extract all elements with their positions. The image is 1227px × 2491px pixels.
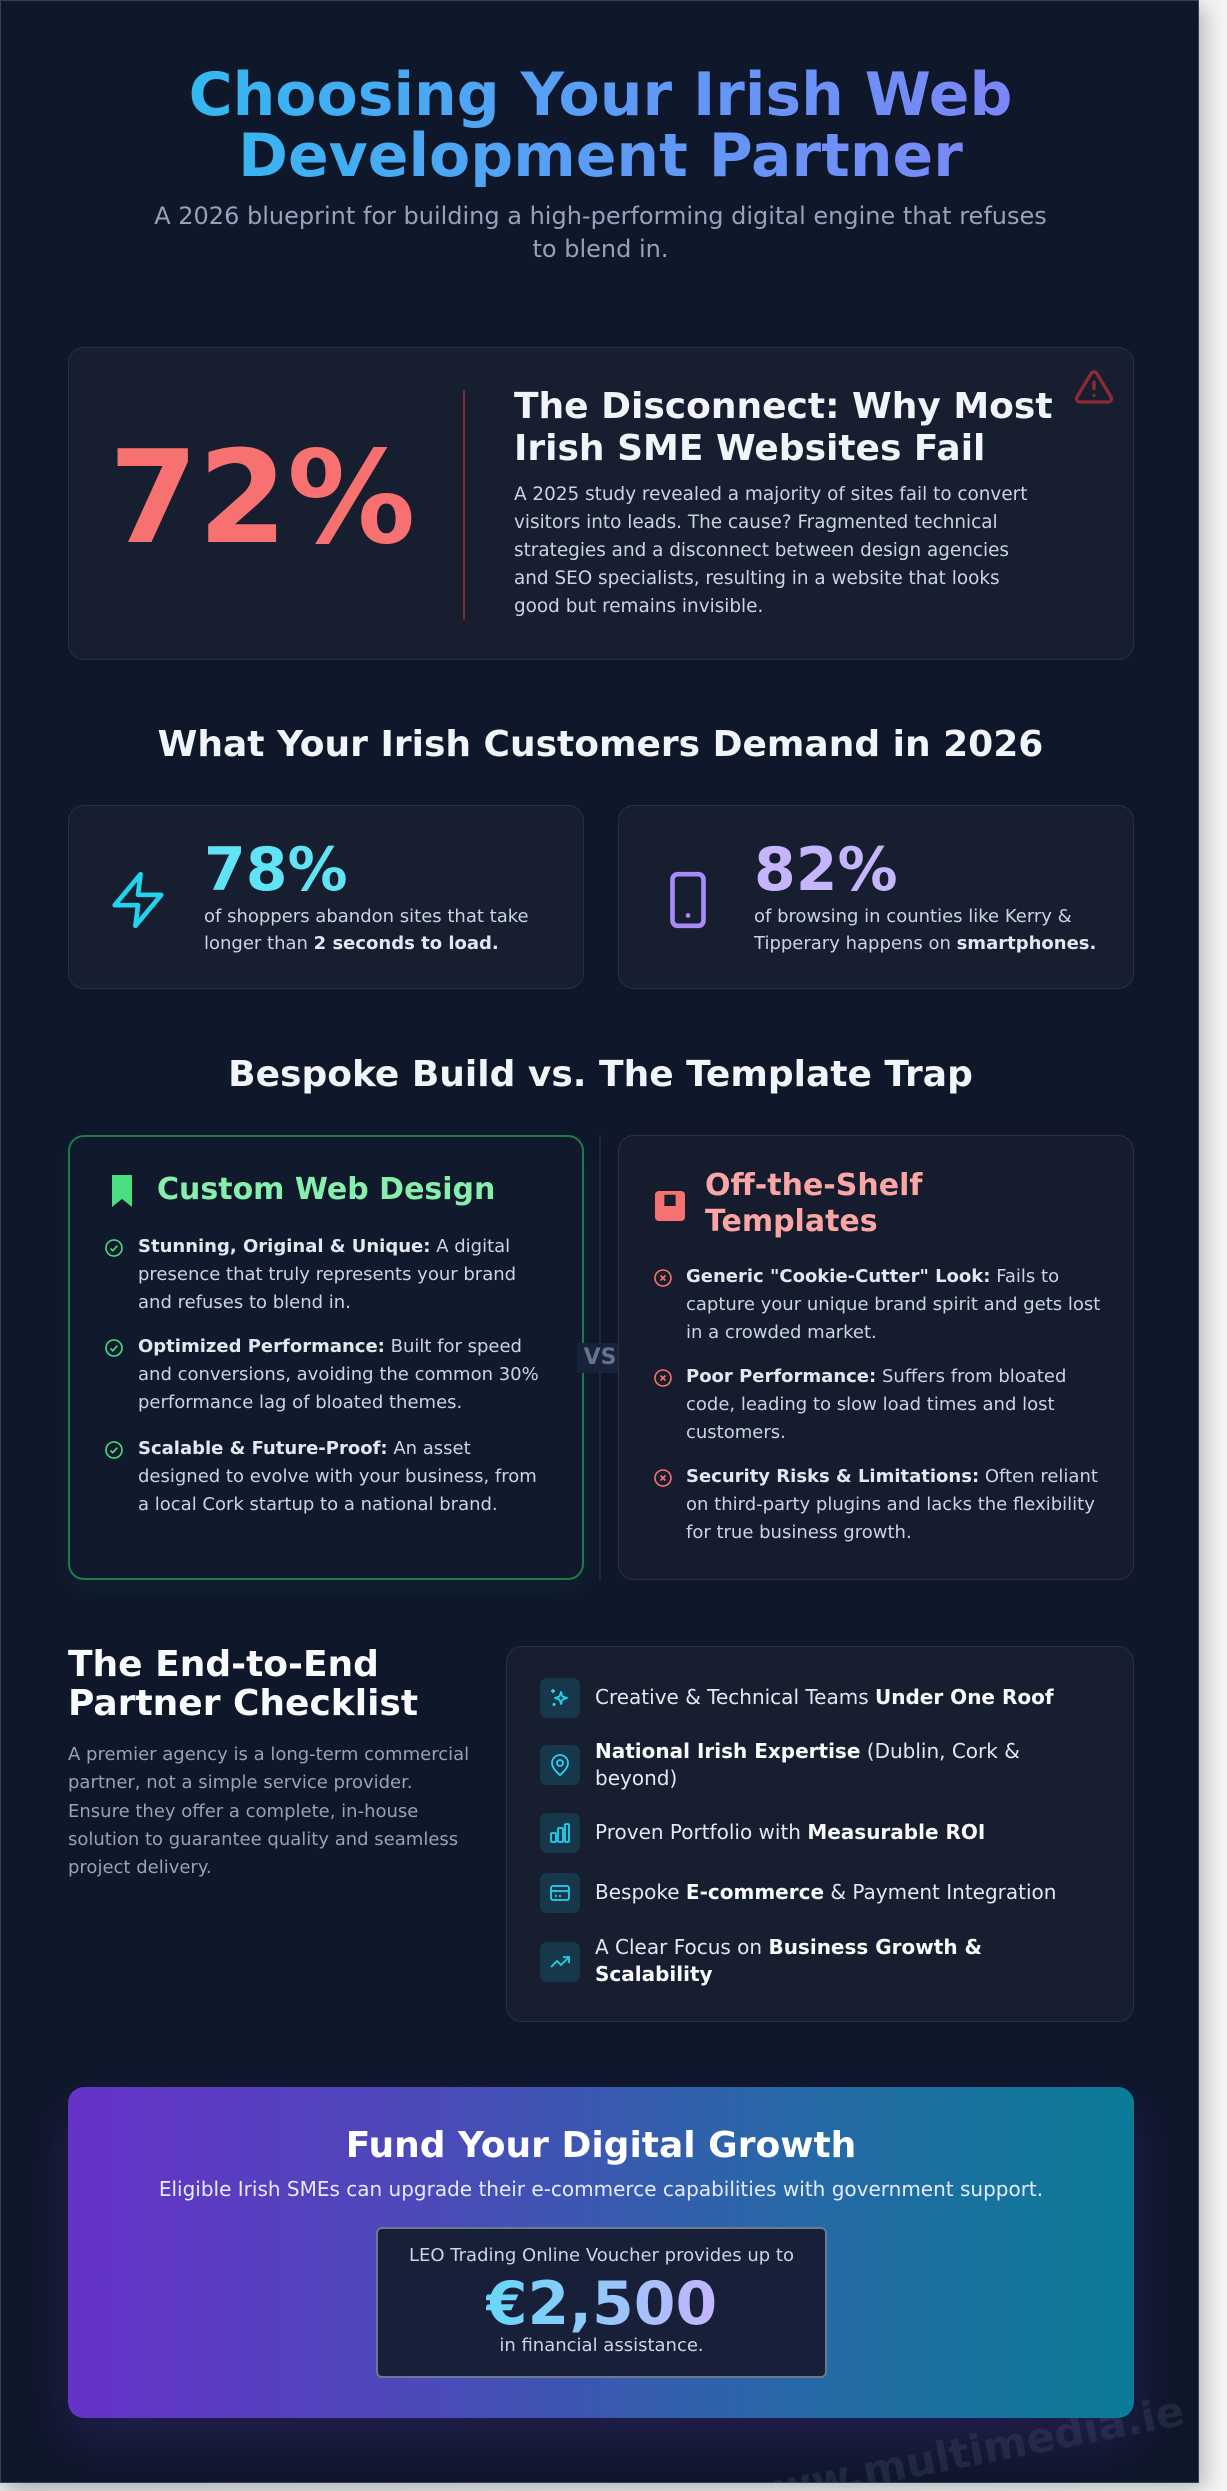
checklist intro text: solution to guarantee quality and seamless xyxy=(68,1829,458,1850)
heading: checklist xyxy=(68,1644,418,1724)
stat number: 82% xyxy=(754,835,898,905)
paragraph xyxy=(514,484,1028,617)
subtitle xyxy=(154,202,1047,263)
checklist intro text: partner, not a simple service provider. xyxy=(68,1772,413,1793)
description xyxy=(204,906,529,954)
checklist intro text: Ensure they offer a complete, in-house xyxy=(68,1801,418,1822)
item 3: on third-party plugins and lacks the flexibility xyxy=(686,1494,1095,1515)
text: Bespoke E-commerce & Payment Integration xyxy=(595,1880,1056,1904)
subtitle: A 2026 blueprint for building a high-performing digital engine that refuses xyxy=(154,202,1047,230)
heading: checklist: The End-to-End xyxy=(68,1644,379,1685)
panel: checklist xyxy=(506,1646,1134,2022)
item 3 xyxy=(138,1438,537,1515)
description: of shoppers abandon sites that take xyxy=(204,906,529,927)
description xyxy=(754,906,1096,954)
voucher label: LEO Trading Online Voucher provides up to xyxy=(409,2245,794,2266)
checklist item icons xyxy=(540,1678,580,1718)
heading xyxy=(514,386,1053,469)
text: National Irish Expertise (Dublin, Cork & xyxy=(595,1739,1020,1763)
paragraph: and SEO specialists, resulting in a website that looks xyxy=(514,568,1000,589)
icon: warning xyxy=(1074,370,1114,404)
voucher amount: €2,500 xyxy=(486,2269,717,2339)
icons: x marks xyxy=(654,1269,672,1287)
item 3: for true business growth. xyxy=(686,1522,912,1543)
title: Development Partner xyxy=(238,121,963,191)
item 2: performance lag of bloated themes. xyxy=(138,1392,462,1413)
paragraph: A 2025 study revealed a majority of sites fail to convert xyxy=(514,484,1027,505)
title: Custom Web Design xyxy=(157,1172,495,1207)
big stat 72%: 72% xyxy=(109,424,415,573)
voucher footer: in financial assistance. xyxy=(499,2335,704,2356)
heading: customers demand: What Your Irish Customers Demand in 2026 xyxy=(158,724,1043,765)
item 1: Stunning, Original & Unique: A digital xyxy=(138,1236,510,1257)
item 1: capture your unique brand spirit and gets lost xyxy=(686,1294,1100,1315)
checklist intro text: A premier agency is a long-term commercial xyxy=(68,1744,469,1765)
item 2: code, leading to slow load times and lost xyxy=(686,1394,1055,1415)
panel: disconnect xyxy=(68,347,1134,660)
text: A Clear Focus on Business Growth & xyxy=(595,1935,982,1959)
description: Tipperary happens on smartphones. xyxy=(754,933,1096,954)
item 1: Generic "Cookie-Cutter" Look: Fails to xyxy=(686,1266,1059,1287)
item 2: Poor Performance: Suffers from bloated xyxy=(686,1366,1066,1387)
title xyxy=(1,65,1200,187)
item 2 xyxy=(138,1336,539,1413)
item 1 xyxy=(686,1266,1100,1343)
icons: checks xyxy=(105,1239,123,1257)
subtitle: to blend in. xyxy=(532,235,668,263)
item 1: in a crowded market. xyxy=(686,1322,877,1343)
item 1: presence that truly represents your brand xyxy=(138,1264,516,1285)
heading: The Disconnect: Why Most xyxy=(514,386,1053,427)
panel: off-the-shelf templates xyxy=(618,1135,1134,1580)
VS badge: VS xyxy=(584,1345,616,1370)
heading: Irish SME Websites Fail xyxy=(514,428,985,469)
title xyxy=(705,1168,923,1239)
paragraph: good but remains invisible. xyxy=(514,596,763,617)
item 3: Security Risks & Limitations: Often reliant xyxy=(686,1466,1098,1487)
item 2: and conversions, avoiding the common 30% xyxy=(138,1364,539,1385)
voucher box xyxy=(376,2227,827,2378)
divider line xyxy=(599,1135,601,1580)
item 2 xyxy=(686,1366,1066,1443)
panel: stat 78% xyxy=(68,805,584,989)
icon: smartphone xyxy=(670,872,706,928)
paragraph: strategies and a disconnect between design agencies xyxy=(514,540,1009,561)
text: Scalability xyxy=(595,1962,713,1986)
icon: template box xyxy=(655,1191,685,1221)
checklist intro text xyxy=(68,1744,469,1878)
icon: lightning xyxy=(112,872,164,928)
item 3 xyxy=(686,1466,1098,1543)
panel: funding CTA xyxy=(68,2087,1134,2418)
item 3: Scalable & Future-Proof: An asset xyxy=(138,1438,471,1459)
description: of browsing in counties like Kerry & xyxy=(754,906,1072,927)
text: beyond) xyxy=(595,1766,677,1790)
item 1: and refuses to blend in. xyxy=(138,1292,351,1313)
stat number: 78% xyxy=(204,835,348,905)
title: Off-the-Shelf xyxy=(705,1168,922,1203)
panel: custom web design xyxy=(68,1135,584,1580)
panel: stat 82% xyxy=(618,805,1134,989)
checklist item texts: Creative & Technical Teams Under One Roof xyxy=(595,1685,1054,1709)
paragraph: visitors into leads. The cause? Fragmented technical xyxy=(514,512,998,533)
icon: bookmark xyxy=(112,1175,132,1207)
title: Choosing Your Irish Web xyxy=(189,60,1012,130)
VS badge xyxy=(577,1343,623,1373)
checklist intro text: project delivery. xyxy=(68,1857,212,1878)
heading: bespoke vs template: Bespoke Build vs. The Template Trap xyxy=(228,1054,973,1095)
CTA title: Fund Your Digital Growth xyxy=(346,2125,856,2166)
item 3: designed to evolve with your business, from xyxy=(138,1466,537,1487)
item 1 xyxy=(138,1236,516,1313)
item 2: customers. xyxy=(686,1422,786,1443)
item 2: Optimized Performance: Built for speed xyxy=(138,1336,522,1357)
heading: checklist: Partner Checklist xyxy=(68,1683,418,1724)
title: Templates xyxy=(705,1204,878,1239)
text: Proven Portfolio with Measurable ROI xyxy=(595,1820,985,1844)
item 3: a local Cork startup to a national brand. xyxy=(138,1494,498,1515)
divider xyxy=(463,390,465,620)
CTA subtitle: Eligible Irish SMEs can upgrade their e-commerce capabilities with government support. xyxy=(159,2177,1043,2201)
description: longer than 2 seconds to load. xyxy=(204,933,499,954)
